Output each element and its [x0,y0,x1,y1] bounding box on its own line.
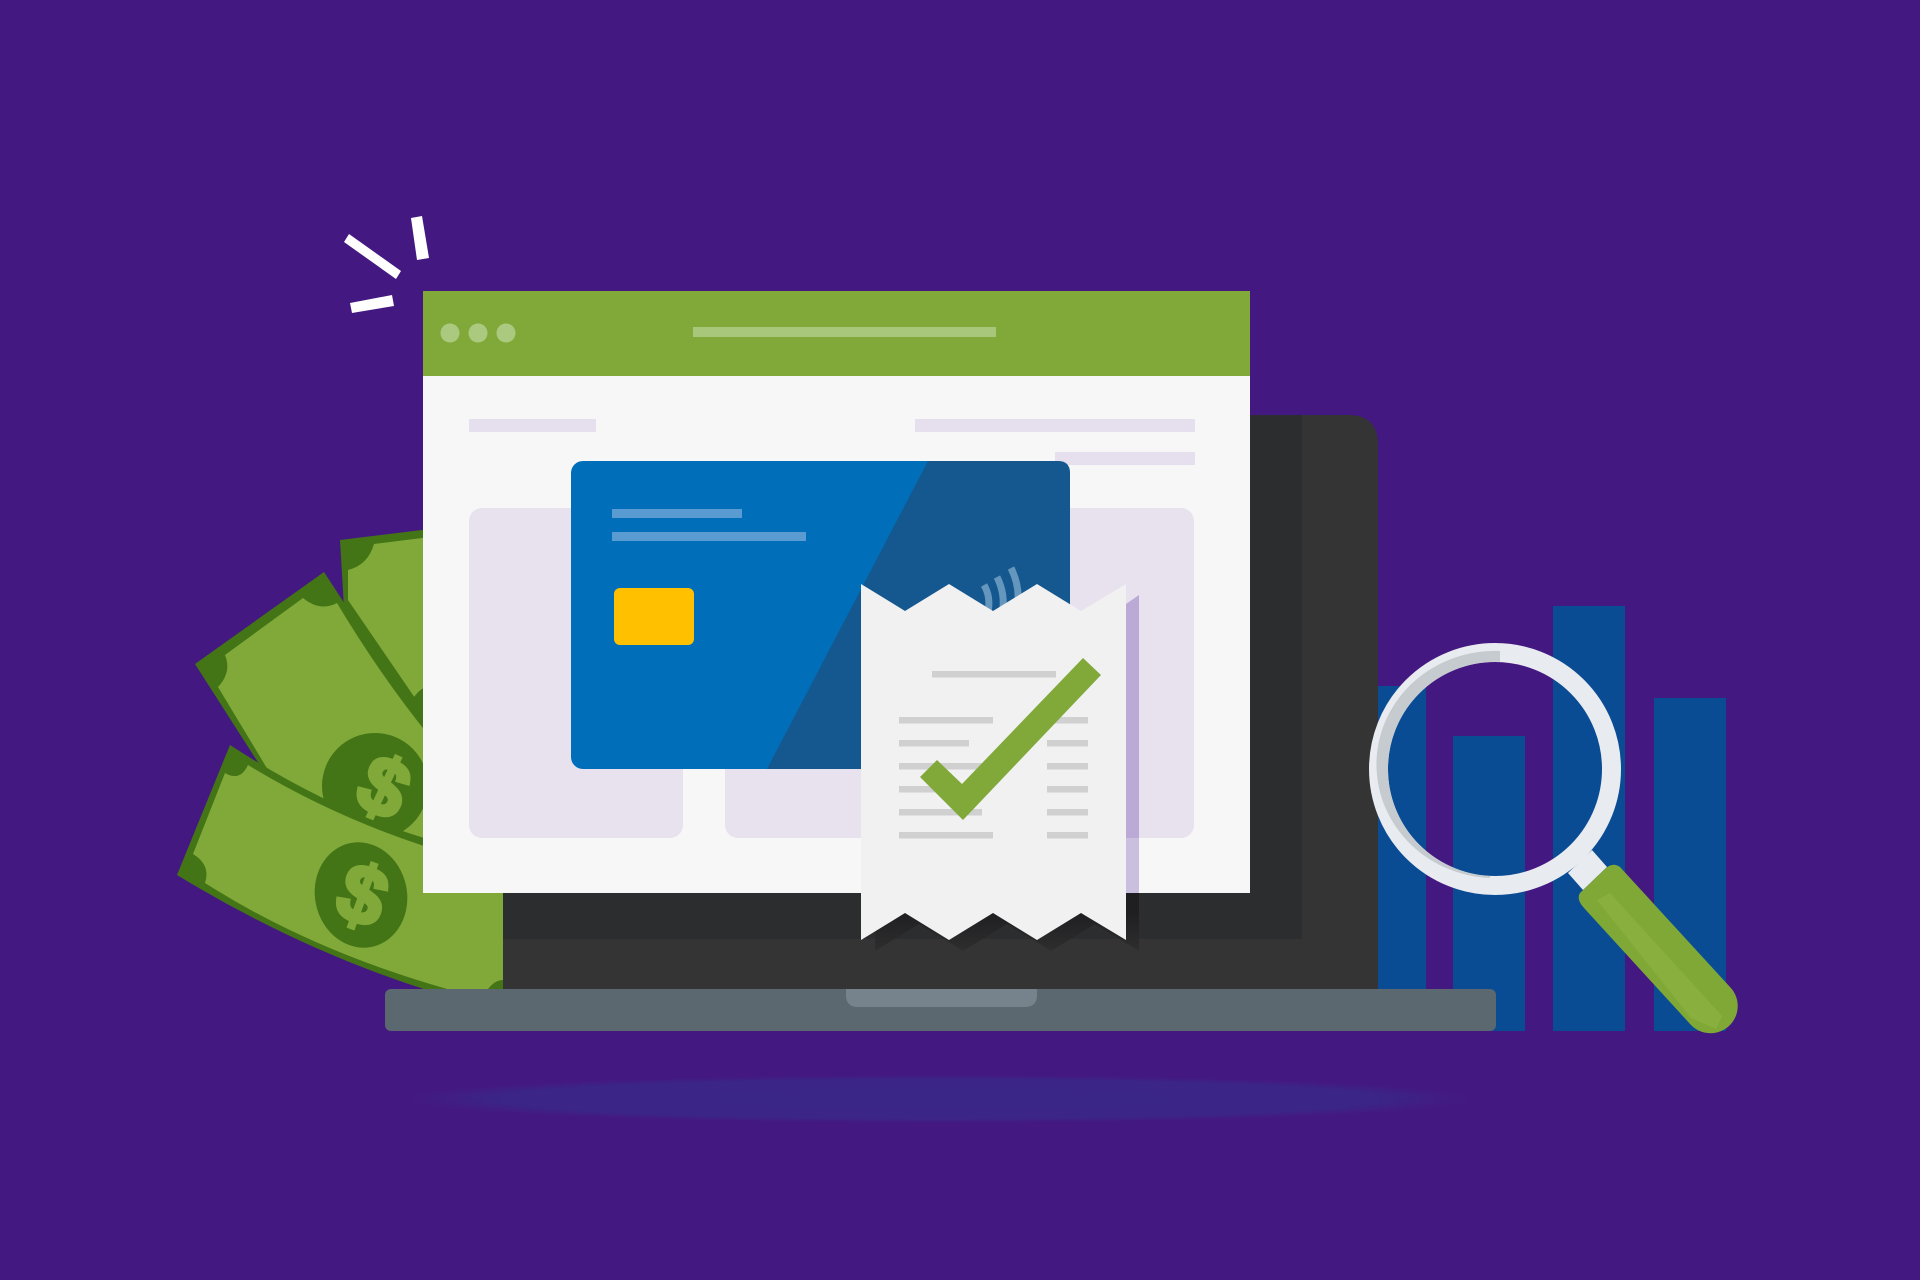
receipt bottom shadow [875,893,1139,951]
magnifier ring inner shade [1376,651,1500,878]
card face [571,461,1070,769]
window control dots [440,324,516,342]
window header bar [423,291,1250,376]
icon: white spark lines [344,216,429,313]
card text lines [612,509,806,541]
receipt paper [861,584,1126,940]
card dark stripe [767,461,1070,769]
magnifier handle [1579,865,1738,1033]
magnifier ring [1378,652,1612,886]
bill: middle [195,572,430,850]
bill: back [340,529,474,749]
bar chart [1378,606,1726,1031]
content placeholder lines [469,419,1195,465]
ground shadow [405,1075,1475,1123]
content panels [469,508,1194,838]
magnifier neck [1568,850,1607,890]
address bar [693,327,996,337]
icon: magnifying glass [1376,651,1738,1033]
window body [423,376,1250,893]
receipt with shadow [861,584,1139,951]
laptop base [385,989,1496,1031]
bill: front [177,745,503,991]
browser window [423,291,1250,893]
icon: fan of dollar bills [177,529,503,991]
credit card [571,461,1070,769]
icon: check mark [920,658,1101,820]
icon: contactless waves [984,568,1018,614]
bill: middle: $ [344,737,424,839]
receipt text lines [899,671,1088,838]
receipt side shadow [1126,595,1139,893]
bill: front: $ [326,845,400,946]
card chip [614,588,694,645]
laptop screen [503,415,1378,989]
handle highlight [1597,893,1722,1029]
